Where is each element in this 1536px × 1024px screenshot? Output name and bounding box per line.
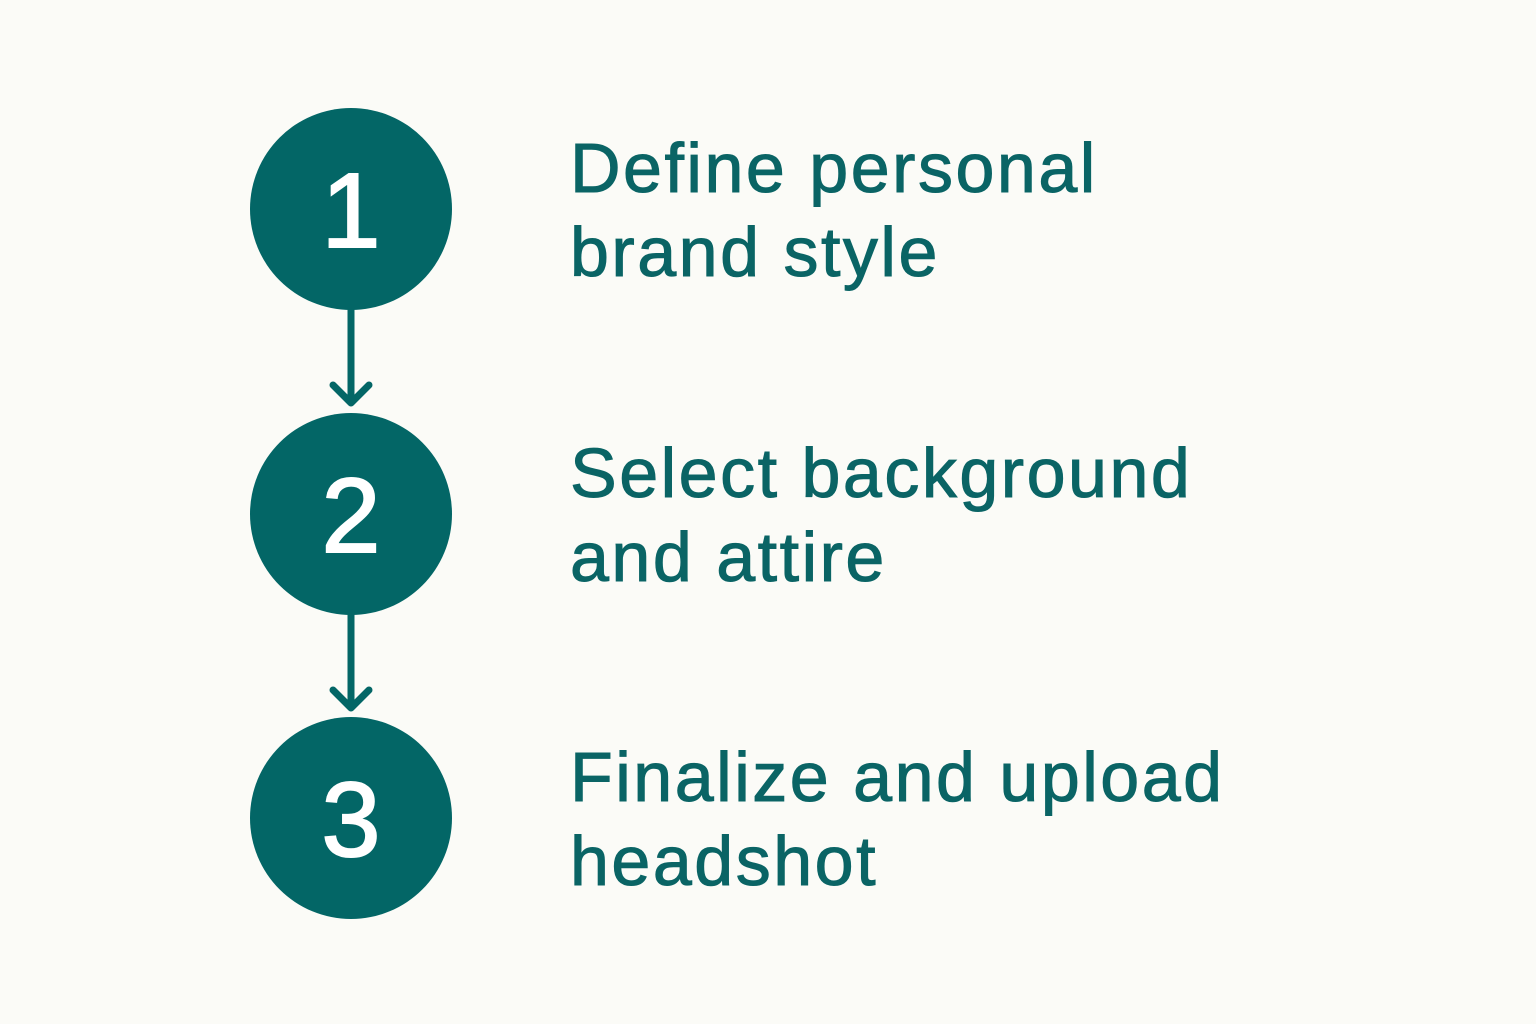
arrow 2 to 3 [333,613,369,708]
step 2 text: and attire [570,518,887,596]
circle 1: 1 [322,152,380,270]
arrow 1 to 2 [333,308,369,403]
circle 3: 3 [322,761,380,879]
circle 3 [250,717,452,919]
step 2 text: Select background [570,434,1192,512]
step 1 text: brand style [570,213,940,291]
step 3 text [570,738,1225,900]
step 3 text: Finalize and upload [570,738,1225,816]
circle 1 [250,108,452,310]
circle 2 [250,413,452,615]
step 1 text: Define personal [570,129,1098,207]
step 3 text: headshot [570,822,878,900]
step 2 text [570,434,1192,596]
step 1 text [570,129,1098,291]
circle 2: 2 [322,457,380,575]
